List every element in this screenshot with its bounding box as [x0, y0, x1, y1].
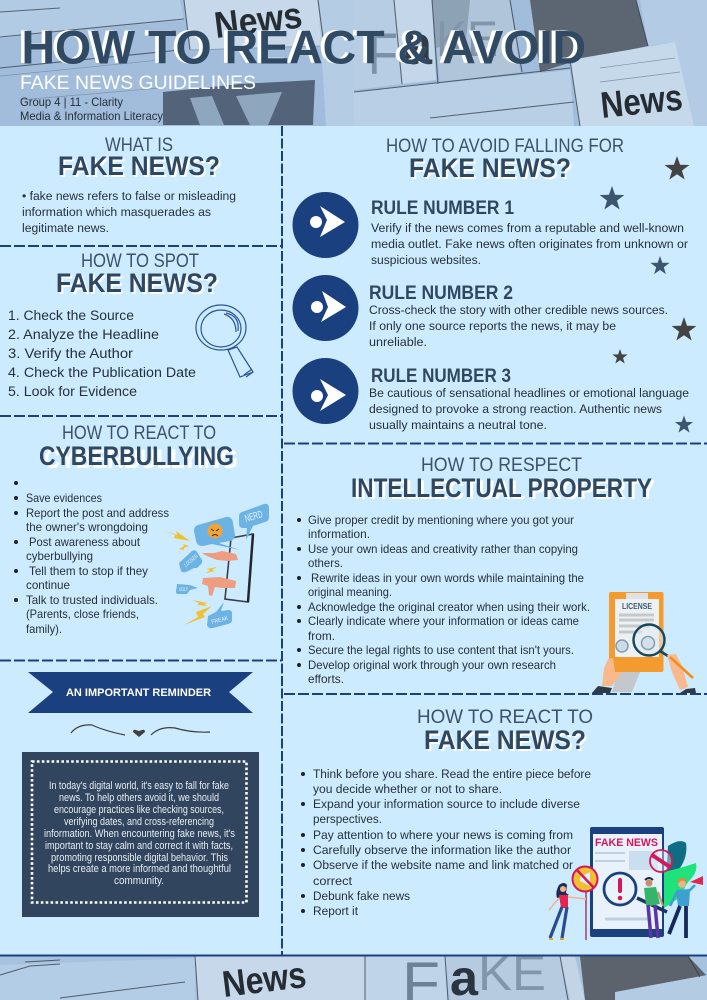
bullet list: Develop original work through your own research	[308, 658, 556, 672]
header newspaper collage: News	[599, 77, 684, 126]
bullet list: correct	[313, 874, 353, 888]
icon: magnifying glass	[196, 305, 253, 377]
heading: fake news: FAKE NEWS?	[58, 151, 220, 181]
bullet list	[14, 481, 169, 636]
bullet list: original meaning.	[308, 585, 392, 599]
bullet list: Tell them to stop if they	[29, 564, 148, 578]
heading: fake news: FAKE NEWS?	[60, 153, 222, 183]
rule 2	[292, 275, 668, 349]
heading: what is: WHAT IS	[105, 135, 173, 156]
subtitle: FAKE NEWS GUIDELINES	[20, 72, 256, 94]
bullet list: Use your own ideas and creativity rather than copying	[308, 542, 578, 556]
icon: rule 3 arrow	[292, 358, 358, 424]
illustration: fake news tablet and people	[549, 827, 703, 940]
bullet list: from.	[308, 629, 335, 643]
reminder box: news. To help others avoid it, we should	[59, 792, 219, 804]
title: HOW TO REACT & AVOID	[22, 22, 586, 74]
bullet list: Debunk fake news	[313, 889, 410, 903]
reminder box: important to stay calm and correct it with facts,	[45, 840, 233, 852]
bullet list: (Parents, close friends,	[26, 607, 139, 621]
group and subject text: Group 4 | 11 - Clarity	[20, 96, 123, 109]
rule 3	[292, 358, 689, 432]
rule 1: Verify if the news comes from a reputable and well-known	[371, 221, 684, 235]
header newspaper collage: F	[368, 22, 398, 87]
rule 3: usually maintains a neutral tone.	[369, 418, 547, 432]
header newspaper collage	[0, 0, 707, 126]
heading: how to avoid: HOW TO AVOID FALLING FOR	[386, 136, 624, 157]
heading: intellectual property: INTELLECTUAL PROPERTY	[354, 475, 655, 505]
title: HOW TO REACT & AVOID	[18, 21, 582, 74]
numbered list: 5. Look for Evidence	[8, 384, 137, 400]
bullet list: Pay attention to where your news is coming from	[313, 828, 573, 842]
rule 2: Cross-check the story with other credible news sources.	[369, 303, 668, 317]
reminder box: verifying dates, and cross-referencing	[64, 816, 214, 828]
illustration: license under magnifier: LICENSE	[622, 601, 652, 611]
rule 1: suspicious websites.	[371, 253, 481, 267]
bullet list: Clearly indicate where your information or ideas came	[308, 614, 579, 628]
rule 3: RULE NUMBER 3	[371, 365, 511, 387]
heading: how to react to: HOW TO REACT TO	[62, 423, 216, 444]
icon: rule 1 arrow	[292, 192, 358, 258]
footer newspaper collage	[0, 945, 707, 1000]
header newspaper collage: KE	[436, 11, 498, 67]
bullet list: Rewrite ideas in your own words while maintaining the	[311, 571, 584, 585]
heading: intellectual property: INTELLECTUAL PROPERTY	[351, 473, 652, 503]
definition text	[22, 189, 236, 235]
numbered list	[8, 308, 196, 400]
bullet list: continue	[26, 578, 70, 592]
bullet list: Secure the legal rights to use content that isn't yours.	[308, 643, 574, 657]
reminder box: community.	[114, 875, 164, 887]
bullet list: Expand your information source to include diverse	[313, 797, 580, 811]
bullet list: efforts.	[308, 672, 344, 686]
header newspaper collage: a	[404, 13, 433, 76]
definition text: legitimate news.	[22, 221, 109, 235]
bullet list: you decide whether or not to share.	[313, 782, 502, 796]
illustration: fake news tablet and people: FAKE NEWS	[595, 837, 658, 849]
rule 1: media outlet. Fake news often originates from unknown or	[371, 237, 688, 251]
reminder box: encourage practices like checking sources,	[54, 804, 224, 816]
reminder box: information. When encountering fake news, it's	[44, 828, 235, 840]
rule 1	[292, 192, 688, 267]
bottom rule	[0, 954, 707, 956]
bullet list: Report the post and address	[26, 506, 169, 520]
definition text: • fake news refers to false or misleading	[22, 189, 236, 203]
panel: how to react to fake news	[301, 707, 703, 940]
bullet list	[297, 513, 590, 686]
rule 2: If only one source reports the news, it may be	[369, 319, 616, 333]
rule 3: Be cautious of sensational headlines or emotional language	[369, 386, 689, 400]
illustration: cyberbullying phone: FREAK	[211, 616, 229, 626]
panel: how to react to cyberbullying	[14, 423, 269, 636]
bullet list: Carefully observe the information like the author	[313, 843, 571, 857]
group and subject text: Media & Information Literacy	[20, 110, 163, 123]
bullet list: Acknowledge the original creator when using their work.	[308, 600, 590, 614]
rule 2: RULE NUMBER 2	[369, 282, 513, 304]
bullet list: Save evidences	[26, 491, 102, 505]
heading: cyberbullying: CYBERBULLYING	[44, 444, 238, 474]
heading: fake news: FAKE NEWS?	[411, 155, 573, 185]
bullet list: family).	[26, 622, 62, 636]
numbered list: 3. Verify the Author	[8, 346, 133, 362]
reminder box: In today's digital world, it's easy to fall for fake	[49, 780, 229, 792]
panel: important reminder	[22, 672, 259, 917]
rule 2: unreliable.	[369, 335, 427, 349]
heading: cyberbullying: CYBERBULLYING	[39, 441, 234, 471]
decorative stars	[600, 156, 696, 433]
heading: fake news: FAKE NEWS?	[426, 727, 588, 757]
numbered list: 2. Analyze the Headline	[8, 327, 159, 343]
heading: fake news: FAKE NEWS?	[58, 270, 220, 300]
group and subject text	[20, 96, 163, 123]
bullet list: perspectives.	[313, 812, 382, 826]
banner: AN IMPORTANT REMINDER	[66, 687, 211, 699]
bullet list: information.	[308, 527, 370, 541]
banner	[28, 672, 253, 713]
heading: how to respect: HOW TO RESPECT	[421, 455, 582, 476]
definition text: information which masquerades as	[22, 205, 211, 219]
bullet list: Observe if the website name and link matched or	[313, 858, 573, 872]
bullet list: the owner's wrongdoing	[26, 520, 148, 534]
heading: fake news: FAKE NEWS?	[409, 153, 571, 183]
reminder box: helps create a more informed and thoughtful	[48, 863, 231, 875]
reminder box: promoting responsible digital behavior. This	[51, 852, 228, 864]
rule 1: RULE NUMBER 1	[371, 197, 514, 219]
bullet list: Talk to trusted individuals.	[26, 593, 158, 607]
bullet list: others.	[308, 556, 343, 570]
numbered list: 1. Check the Source	[8, 308, 134, 324]
heading: fake news: FAKE NEWS?	[424, 725, 586, 755]
panel: how to avoid falling for fake news	[292, 136, 696, 433]
panel: what is fake news	[22, 135, 236, 235]
panel: how to respect intellectual property	[297, 455, 696, 693]
panel: how to spot fake news	[8, 251, 253, 400]
heading: how to spot: HOW TO SPOT	[81, 251, 199, 272]
illustration: cyberbullying phone: NERD	[244, 509, 264, 525]
illustration: cyberbullying phone: LOOSER	[183, 554, 200, 569]
illustration: cyberbullying phone	[164, 504, 269, 628]
ornament: heart divider	[71, 725, 210, 737]
bullet list: Give proper credit by mentioning where you got your	[308, 513, 574, 527]
heading: how to react: HOW TO REACT TO	[417, 707, 593, 728]
numbered list: 4. Check the Publication Date	[8, 365, 196, 381]
footer newspaper collage: KE	[478, 945, 546, 1000]
bullet list: Think before you share. Read the entire piece before	[313, 767, 591, 781]
bullet list: Report it	[313, 904, 359, 918]
reminder box	[22, 752, 259, 917]
bullet list	[301, 767, 591, 918]
rule 3: designed to provoke a strong reaction. Authentic news	[369, 402, 662, 416]
heading: fake news: FAKE NEWS?	[56, 268, 218, 298]
bullet list: Post awareness about	[29, 535, 141, 549]
illustration: license under magnifier	[592, 592, 696, 693]
illustration: cyberbullying phone: UGLY	[179, 587, 188, 593]
bullet list: cyberbullying	[26, 549, 93, 563]
icon: rule 2 arrow	[292, 275, 358, 341]
